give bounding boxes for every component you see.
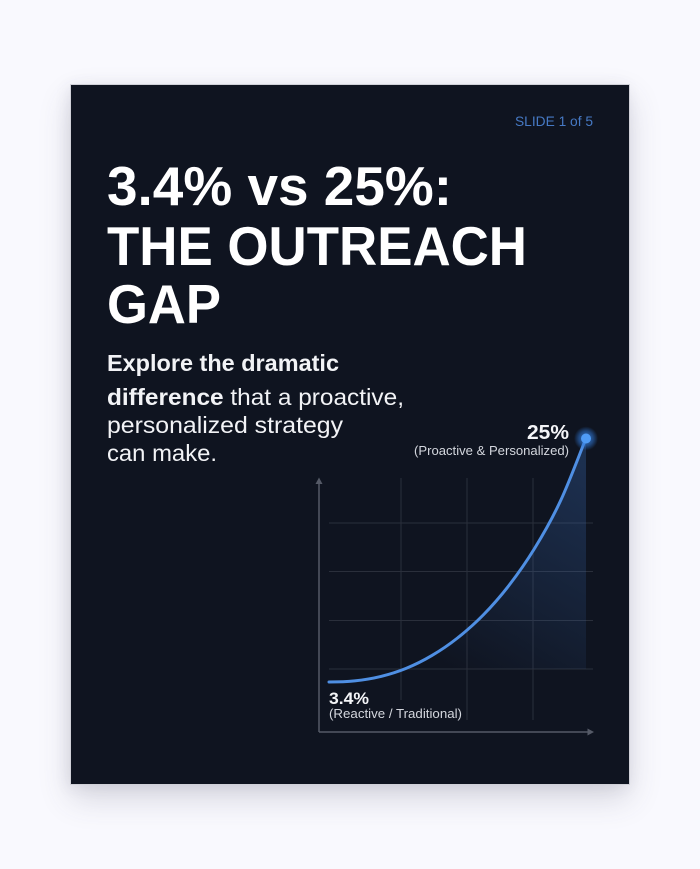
subtitle text: difference that a proactive, [107, 384, 404, 410]
subtitle text: can make. [107, 440, 217, 466]
label: 25% [414, 422, 569, 458]
subtitle text: personalized strategy [107, 412, 344, 438]
label: 25%: (Proactive & Personalized) [414, 443, 569, 458]
label: 3.4%: (Reactive / Traditional) [329, 706, 462, 721]
title: 3.4% vs 25%: [107, 155, 452, 217]
growth chart [316, 422, 598, 736]
title [107, 155, 527, 335]
panel: dark slide card [70, 84, 629, 784]
label: 25%: 25% [527, 422, 569, 444]
shaded area under curve [406, 438, 586, 669]
x axis arrow [319, 728, 594, 736]
subtitle text [107, 350, 404, 466]
label: 3.4% [329, 689, 462, 721]
glowing end point [574, 426, 598, 450]
growth curve [329, 438, 586, 682]
subtitle text: Explore the dramatic [107, 350, 339, 376]
title: THE OUTREACH [107, 215, 527, 277]
y axis arrow [316, 478, 322, 732]
slide counter: SLIDE 1 of 5 [515, 114, 593, 129]
chart grid [329, 478, 593, 720]
title: GAP [107, 273, 221, 335]
label: 3.4%: 3.4% [329, 689, 369, 708]
